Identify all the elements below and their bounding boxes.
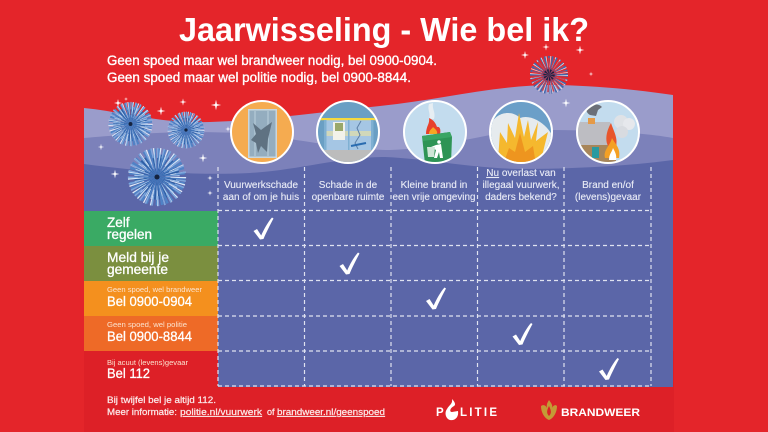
intro text: Geen spoed maar wel politie nodig, bel 0900-8844. (107, 70, 411, 85)
footer text: Bij twijfel bel je altijd 112. (107, 395, 216, 405)
row: zelf regelen: Zelf (107, 215, 130, 230)
column headings (223, 168, 642, 203)
row: bel politie: Geen spoed, wel politie (107, 320, 187, 329)
column headings: illegaal vuurwerk, (482, 180, 560, 191)
footer band (84, 351, 674, 432)
logo: politie: LITIE (460, 407, 497, 419)
row: bel 112 (107, 358, 188, 381)
row: bel 112: Bel 112 (107, 366, 150, 381)
column headings: Kleine brand in (401, 180, 467, 191)
column headings: Vuurwerkschade (224, 180, 298, 191)
intro text (107, 53, 437, 85)
column headings: aan of om je huis (223, 192, 299, 203)
row: meld bij je gemeente (84, 246, 218, 281)
column headings: daders bekend? (485, 192, 557, 203)
column headings: (levens)gevaar (575, 192, 642, 203)
logo: brandweer: BRANDWEER (561, 407, 640, 419)
row: bel brandweer (84, 281, 218, 316)
icon: explosion (490, 101, 552, 165)
row: zelf regelen (84, 211, 218, 246)
column headings: Nu overlast van (486, 168, 556, 179)
column headings: Brand en/of (582, 180, 634, 191)
column headings: Schade in de (319, 180, 378, 191)
column headings: een vrije omgeving (392, 192, 476, 203)
logo: brandweer (541, 400, 640, 420)
intro text: Geen spoed maar wel brandweer nodig, bel 0900-0904. (107, 53, 437, 68)
footer text: Meer informatie: (107, 407, 177, 417)
checkmarks (254, 218, 619, 380)
footer text: of (267, 407, 275, 417)
table grid (218, 167, 651, 386)
footer text: brandweer.nl/geenspoed (277, 407, 385, 417)
row: bel brandweer: Geen spoed, wel brandweer (107, 285, 203, 294)
icon: bus shelter (317, 101, 379, 164)
column headings: openbare ruimte (312, 192, 385, 203)
row: bel brandweer: Bel 0900-0904 (107, 294, 192, 309)
row: bel 112: Bij acuut (levens)gevaar (107, 358, 188, 367)
logo: politie (436, 399, 497, 420)
icon: burning bin (404, 101, 466, 164)
title: Jaarwisseling - Wie bel ik? (179, 12, 589, 49)
wave panel: background hills (84, 85, 673, 387)
row: bel politie (84, 316, 218, 351)
row: zelf regelen: regelen (107, 227, 152, 242)
icon: broken window (231, 101, 293, 163)
row: meld bij je gemeente: Meld bij je (107, 250, 169, 265)
fireworks left (98, 97, 231, 201)
icon: burning house (577, 101, 639, 165)
row: meld bij je gemeente: gemeente (107, 262, 168, 277)
fireworks right (521, 43, 593, 107)
footer text: politie.nl/vuurwerk (180, 407, 263, 417)
footer text (107, 395, 385, 417)
logo: politie: P (436, 407, 444, 419)
row: bel politie: Bel 0900-8844 (107, 329, 192, 344)
